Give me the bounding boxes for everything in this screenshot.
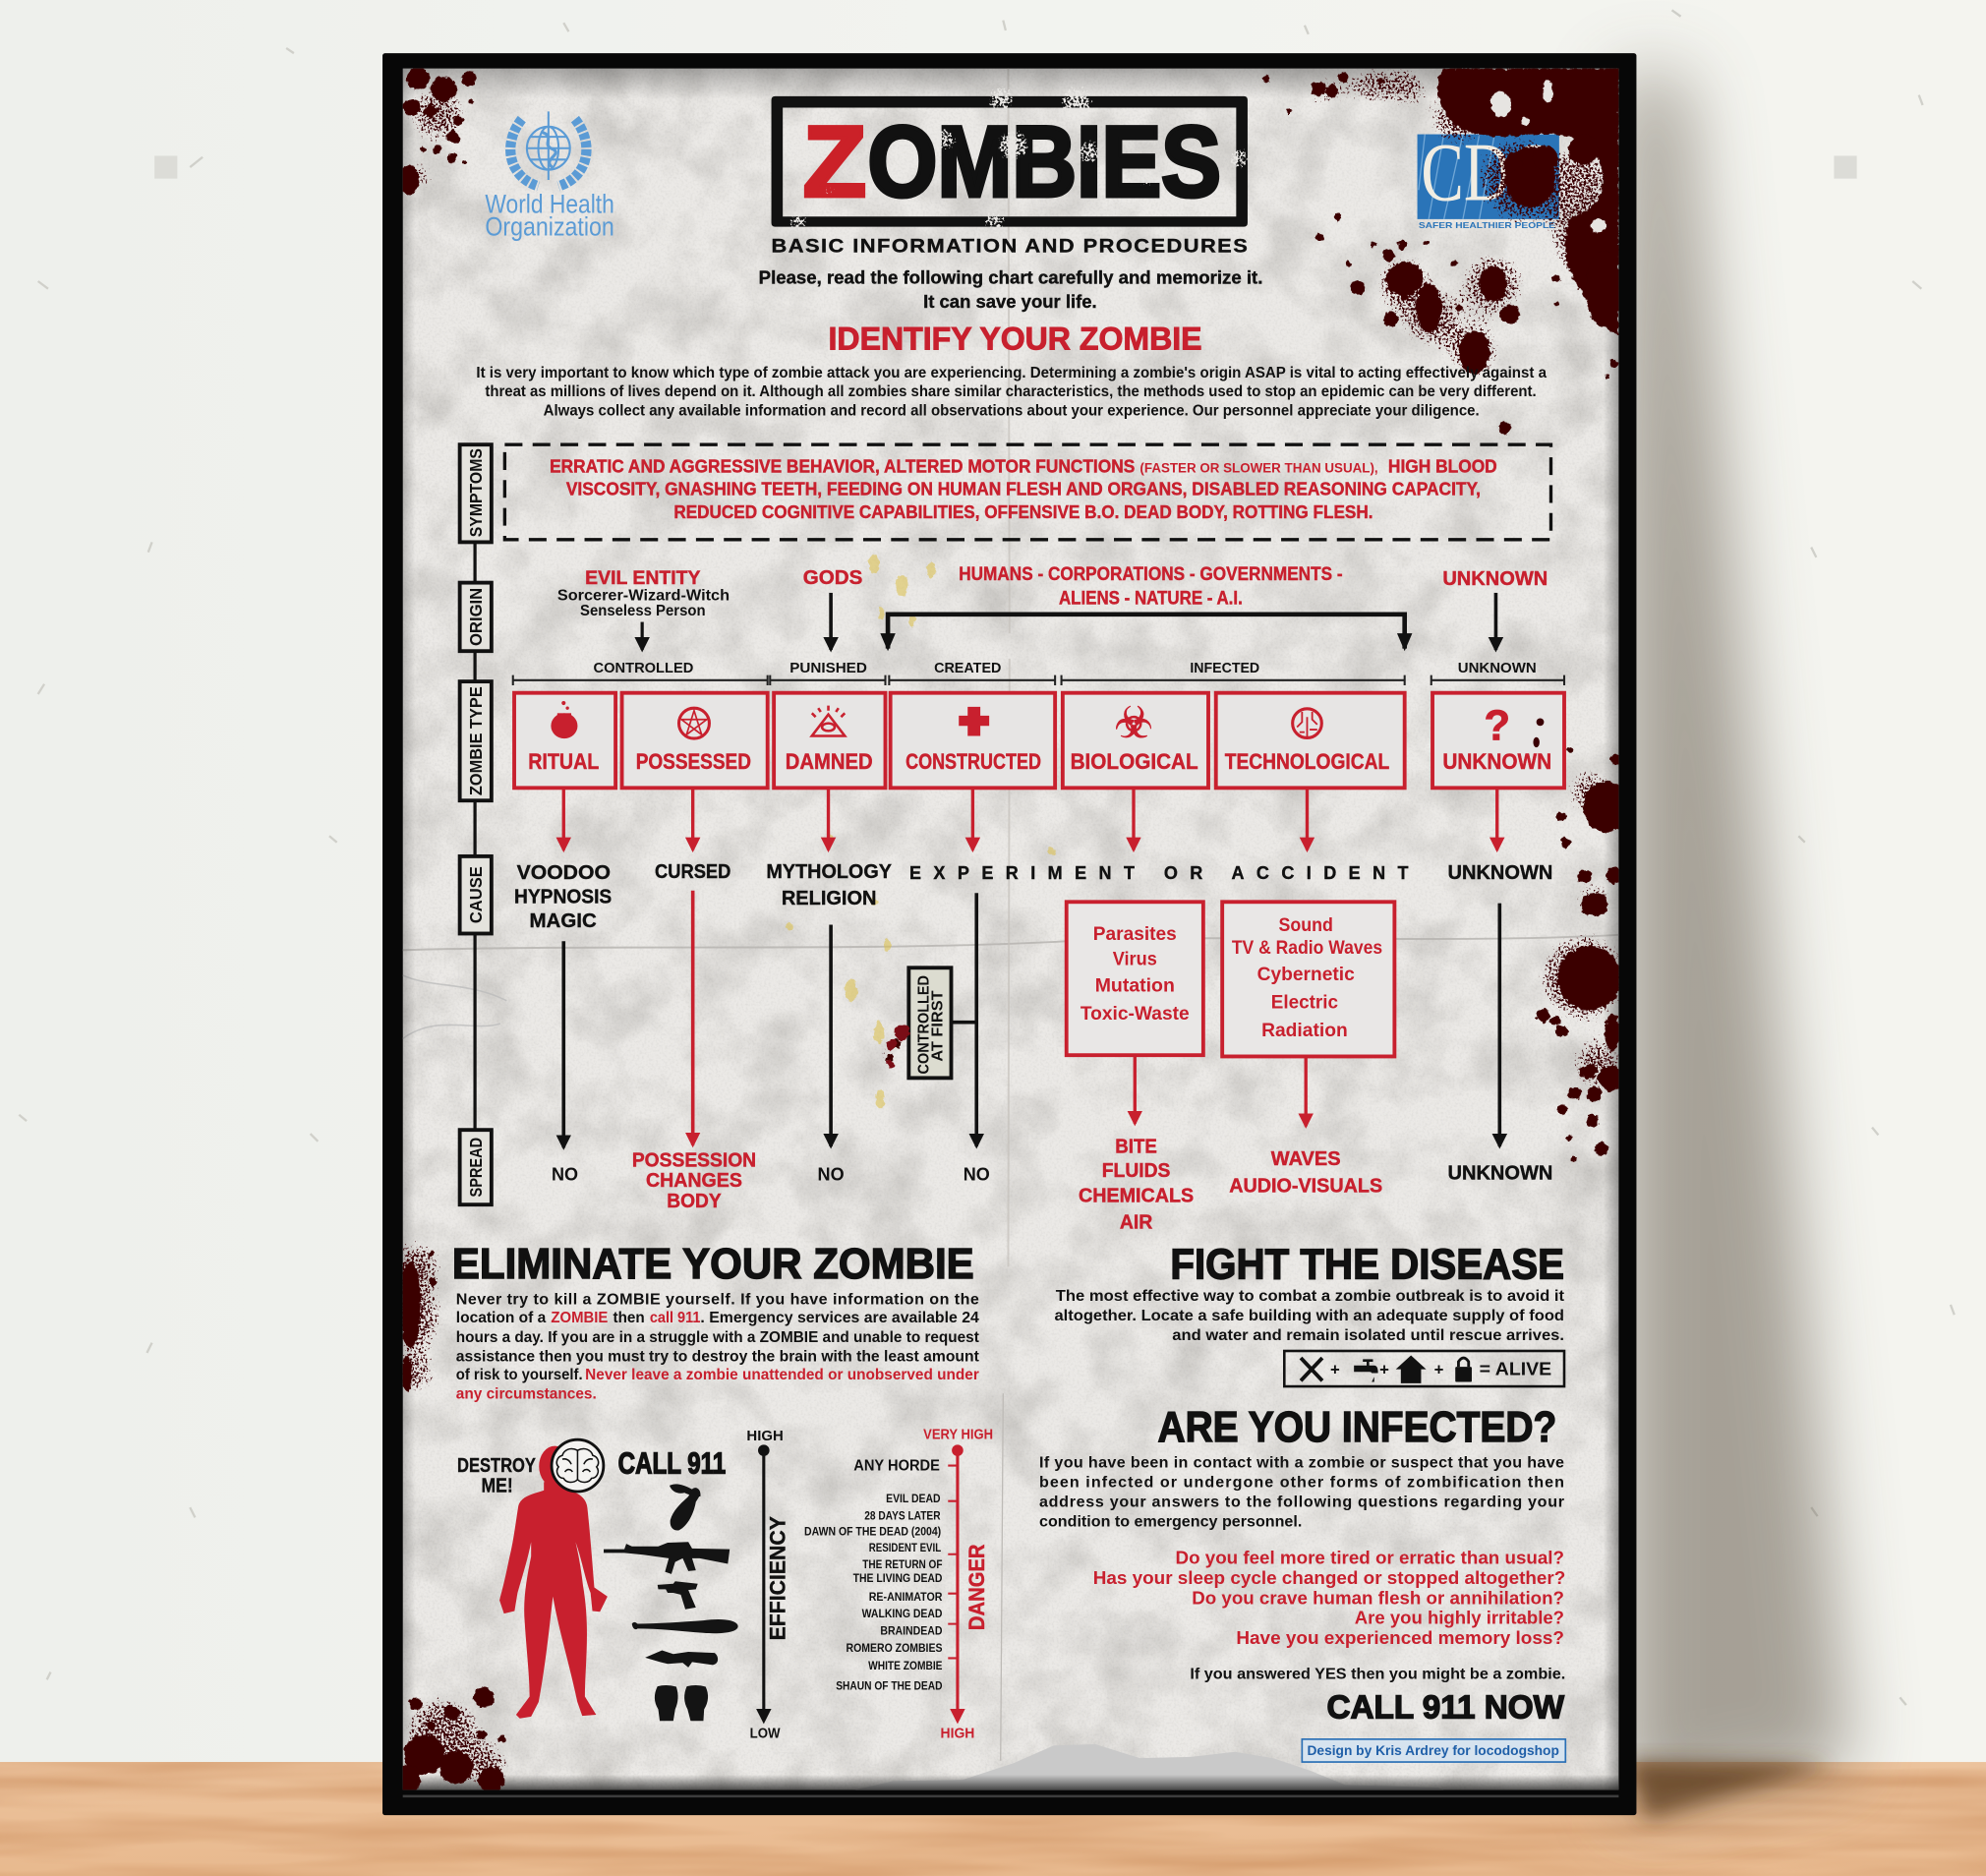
spread labels: NO — [552, 1164, 578, 1185]
type: biological — [1063, 693, 1208, 788]
type: damned: DAMNED — [786, 749, 873, 774]
icon: biohazard: ☣ — [1114, 698, 1153, 748]
icon: pentagram — [679, 708, 709, 738]
icon: question mark: ? — [1484, 701, 1510, 749]
biological causes panel: Parasites — [1093, 924, 1177, 945]
efficiency scale: LOW — [750, 1727, 781, 1742]
spread labels — [552, 1136, 1552, 1234]
title distress — [787, 84, 1252, 234]
formula box: food water shelter safety equals alive — [1284, 1351, 1564, 1386]
logo: CDC: SAFER HEALTHIER PEOPLE — [1419, 220, 1555, 230]
formula box: food water shelter safety equals alive: + — [1330, 1360, 1340, 1378]
type: ritual: RITUAL — [528, 749, 599, 774]
technological causes panel: Cybernetic — [1257, 965, 1355, 985]
group brackets: CREATED — [934, 661, 1002, 676]
infected questions: Do you feel more tired or erratic than usual? — [1176, 1548, 1564, 1567]
title frame — [772, 96, 1248, 227]
spread labels: AIR — [1120, 1212, 1152, 1234]
vertical category axis — [474, 443, 476, 1203]
intro text: It can save your life. — [923, 291, 1097, 312]
cause labels: CURSED — [655, 860, 730, 883]
call 911 weapons list — [604, 1445, 738, 1721]
formula box: food water shelter safety equals alive: = ALIVE — [1480, 1359, 1551, 1378]
eliminate paragraph: of risk to yourself. — [456, 1366, 583, 1383]
eliminate paragraph: ZOMBIE — [551, 1309, 609, 1326]
axis label: origin — [460, 583, 492, 651]
infected paragraph — [1039, 1454, 1565, 1530]
technological causes panel: Radiation — [1261, 1021, 1348, 1041]
logo: World Health Organization: Organization — [485, 212, 614, 242]
icon: circuit brain — [1293, 709, 1321, 737]
origin: evil entity: EVIL ENTITY — [585, 568, 701, 589]
wood floor — [0, 1762, 1986, 1876]
danger ranking labels: SHAUN OF THE DEAD — [836, 1679, 943, 1693]
icon: brain in circle — [552, 1439, 604, 1492]
cause labels: HYPNOSIS — [514, 886, 612, 909]
danger ranking labels: ROMERO ZOMBIES — [847, 1641, 942, 1655]
spread labels: BODY — [667, 1191, 722, 1212]
cause to spread arrows — [563, 891, 1499, 1147]
technological causes panel: Sound — [1279, 915, 1333, 936]
group brackets: PUNISHED — [789, 661, 867, 676]
icon: house — [1396, 1356, 1427, 1383]
icon: rifle — [604, 1542, 730, 1574]
type: unknown — [1432, 693, 1564, 788]
cause labels: MAGIC — [529, 909, 597, 932]
eliminate paragraph: then — [613, 1309, 645, 1326]
biological causes panel: Toxic-Waste — [1081, 1004, 1190, 1025]
paper showing through blood — [1490, 80, 1606, 232]
spread labels: NO — [818, 1164, 845, 1185]
icon: cauldron — [551, 701, 577, 738]
efficiency scale: EFFICIENCY — [766, 1516, 790, 1640]
origin: evil entity: Sorcerer-Wizard-Witch — [557, 587, 730, 605]
icon: human body — [499, 1446, 608, 1719]
type: biological: BIOLOGICAL — [1071, 749, 1198, 774]
symptoms dashed panel: HIGH BLOOD — [1388, 457, 1497, 477]
identify paragraph: Always collect any available information and record all observations about your experience. Our personnel appreciate your diligence. — [544, 403, 1480, 420]
danger ranking labels: THE LIVING DEAD — [853, 1571, 943, 1585]
danger ranking labels: 28 DAYS LATER — [864, 1508, 941, 1522]
symptoms dashed panel — [504, 444, 1550, 540]
infected paragraph: If you have been in contact with a zombie or suspect that you have — [1039, 1454, 1564, 1472]
origin: gods: GODS — [803, 567, 862, 589]
technological causes panel — [1222, 902, 1394, 1056]
eliminate paragraph: any circumstances. — [456, 1384, 597, 1402]
spread labels: NO — [964, 1164, 990, 1185]
infected paragraph: address your answers to the following questions regarding your — [1039, 1493, 1565, 1510]
infected questions: Has your sleep cycle changed or stopped altogether? — [1093, 1568, 1565, 1588]
black poster frame — [382, 53, 1636, 1815]
axis label: cause — [460, 856, 492, 933]
eliminate paragraph: location of a — [456, 1309, 547, 1326]
symptoms dashed panel: VISCOSITY, GNASHING TEETH, FEEDING ON HUMAN FLESH AND ORGANS, DISABLED REASONING CAPACITY, — [566, 480, 1481, 499]
infected questions: Are you highly irritable? — [1355, 1609, 1564, 1628]
origin: gods — [803, 567, 862, 650]
subtitle: BASIC INFORMATION AND PROCEDURES — [772, 236, 1249, 257]
formula box: food water shelter safety equals alive: + — [1434, 1360, 1444, 1378]
danger ranking labels: EVIL DEAD — [886, 1492, 941, 1505]
origin: humans and others with bracket: ALIENS - NATURE - A.I. — [1059, 589, 1243, 610]
axis label: symptoms — [460, 444, 492, 542]
danger ranking labels: RE-ANIMATOR — [869, 1590, 943, 1604]
type: constructed — [891, 693, 1055, 788]
efficiency scale — [746, 1429, 790, 1742]
spread labels: WAVES — [1271, 1148, 1341, 1170]
technological causes panel: Electric — [1271, 993, 1338, 1014]
formula box: food water shelter safety equals alive: + — [1379, 1360, 1389, 1378]
red arrows from types to causes — [563, 788, 1497, 850]
eliminate paragraph: Never try to kill a ZOMBIE yourself. If you have information on the — [456, 1290, 979, 1308]
eliminate paragraph: call 911 — [650, 1309, 700, 1326]
type: technological — [1216, 693, 1405, 788]
red arrows from panels to spread — [1135, 1056, 1306, 1126]
symptoms dashed panel: ERRATIC AND AGGRESSIVE BEHAVIOR, ALTERED MOTOR FUNCTIONS — [550, 457, 1135, 477]
axis label: origin: ORIGIN — [466, 588, 486, 646]
fight paragraph — [1054, 1287, 1565, 1344]
group brackets: CONTROLLED — [594, 661, 694, 676]
icon: eye in triangle — [812, 706, 845, 736]
spread labels: CHEMICALS — [1079, 1186, 1194, 1207]
destroy me figure: DESTROY — [457, 1454, 536, 1477]
icon: medical cross — [959, 707, 989, 736]
designer credit — [1302, 1739, 1565, 1762]
infected questions: Do you crave human flesh or annihilation? — [1192, 1589, 1564, 1609]
logo: World Health Organization: World Health — [485, 189, 614, 218]
infected paragraph: been infected or undergone other forms of zombification then — [1039, 1473, 1564, 1491]
spread labels: FLUIDS — [1102, 1160, 1170, 1182]
biological causes panel: Mutation — [1095, 976, 1175, 997]
danger ranking labels: ANY HORDE — [853, 1458, 940, 1475]
heading: are you infected: ARE YOU INFECTED? — [1157, 1403, 1556, 1451]
halo speckle — [382, 61, 1633, 1795]
efficiency scale: HIGH — [746, 1429, 784, 1444]
spread labels: CHANGES — [646, 1170, 742, 1192]
origin: evil entity: Senseless Person — [580, 602, 706, 619]
eliminate paragraph: . Emergency services are available 24 — [700, 1309, 979, 1326]
danger ranking labels: THE RETURN OF — [862, 1557, 943, 1571]
type: possessed: POSSESSED — [636, 749, 751, 774]
heading: identify your zombie: IDENTIFY YOUR ZOMBIE — [829, 322, 1202, 357]
eliminate paragraph: assistance then you must try to destroy the brain with the least amount — [456, 1347, 979, 1365]
symptoms dashed panel: (FASTER OR SLOWER THAN USUAL), — [1139, 461, 1378, 476]
callout: controlled at first: CONTROLLED — [914, 975, 932, 1074]
icon: pistol — [658, 1581, 698, 1610]
danger ranking labels: BRAINDEAD — [880, 1624, 943, 1638]
icon: WHO emblem — [510, 111, 586, 186]
biological causes panel — [1067, 902, 1203, 1055]
type: possessed — [622, 693, 768, 788]
type: ritual — [514, 693, 615, 788]
danger ranking labels: WHITE ZOMBIE — [868, 1659, 942, 1672]
axis label: cause: CAUSE — [466, 866, 486, 923]
eliminate paragraph: hours a day. If you are in a struggle with a ZOMBIE and unable to request — [456, 1328, 979, 1346]
fight paragraph: and water and remain isolated until rescue arrives. — [1172, 1326, 1564, 1344]
group brackets: INFECTED — [1190, 661, 1259, 676]
infected paragraph: condition to emergency personnel. — [1039, 1512, 1302, 1530]
axis label: spread — [460, 1130, 492, 1204]
group brackets: UNKNOWN — [1458, 661, 1537, 676]
title block: ZOMBIES: OMBIES — [867, 106, 1221, 218]
symptoms dashed panel: REDUCED COGNITIVE CAPABILITIES, OFFENSIVE B.O. DEAD BODY, ROTTING FLESH. — [673, 502, 1373, 522]
eliminate paragraph: Never leave a zombie unattended or unobserved under — [585, 1366, 980, 1383]
blood splatter — [382, 61, 1633, 1795]
call 911 now: CALL 911 NOW — [1326, 1690, 1564, 1727]
axis label: symptoms: SYMPTOMS — [466, 448, 486, 537]
cause labels: RELIGION — [782, 887, 876, 909]
axis label: zombie type — [460, 681, 492, 800]
spread labels: POSSESSION — [632, 1150, 756, 1172]
origin: humans and others with bracket — [880, 564, 1412, 651]
technological causes panel: TV & Radio Waves — [1232, 938, 1382, 959]
identify paragraph: threat as millions of lives depend on it. Although all zombies share similar characteristics, the methods used to stop an epidemic can be very different. — [485, 383, 1537, 400]
callout: controlled at first: AT FIRST — [928, 990, 946, 1062]
danger scale — [923, 1428, 993, 1742]
spread labels: BITE — [1115, 1136, 1157, 1157]
fight paragraph: altogether. Locate a safe building with an adequate supply of food — [1054, 1307, 1564, 1324]
axis label: spread: SPREAD — [466, 1138, 486, 1197]
danger ranking labels: DAWN OF THE DEAD (2004) — [804, 1524, 941, 1538]
cause labels: EXPERIMENT OR ACCIDENT — [909, 863, 1409, 883]
solid blobs — [395, 67, 1629, 1795]
danger ranking labels: RESIDENT EVIL — [869, 1541, 942, 1554]
cause labels: UNKNOWN — [1447, 861, 1552, 884]
icon: baseball bat — [632, 1619, 738, 1633]
type: damned — [774, 693, 885, 788]
cause labels — [514, 860, 1552, 932]
type: constructed: CONSTRUCTED — [905, 749, 1041, 774]
identify paragraph — [476, 365, 1547, 420]
call 911 weapons list: CALL 911 — [618, 1445, 726, 1480]
danger scale: DANGER — [964, 1544, 989, 1630]
icon: fork and knife — [1301, 1358, 1322, 1380]
intro text: Please, read the following chart carefully and memorize it. — [759, 267, 1262, 288]
cause labels: VOODOO — [517, 861, 611, 884]
danger ranking labels: WALKING DEAD — [862, 1607, 943, 1620]
axis label: zombie type: ZOMBIE TYPE — [466, 686, 486, 795]
type: unknown: UNKNOWN — [1442, 749, 1551, 774]
infected questions: Have you experienced memory loss? — [1236, 1628, 1564, 1648]
origin: unknown — [1442, 568, 1548, 650]
icon: padlock — [1455, 1358, 1472, 1382]
icon: molotov — [670, 1484, 701, 1531]
frame shadow — [1621, 76, 1849, 1819]
origin: evil entity — [557, 568, 730, 650]
icon: knife — [645, 1651, 718, 1668]
type: technological: TECHNOLOGICAL — [1225, 749, 1389, 774]
title block: ZOMBIES — [772, 96, 1248, 227]
group brackets — [513, 661, 1564, 685]
danger scale: HIGH — [941, 1727, 974, 1742]
title block: ZOMBIES: Z — [803, 106, 866, 218]
cause labels: MYTHOLOGY — [766, 860, 892, 883]
danger scale: VERY HIGH — [923, 1428, 993, 1443]
destroy me figure: ME! — [482, 1475, 513, 1497]
logo: World Health Organization — [485, 111, 614, 242]
danger ranking labels — [804, 1458, 943, 1693]
designer credit: Design by Kris Ardrey for locodogshop — [1307, 1743, 1559, 1759]
intro text — [759, 267, 1262, 312]
biological causes panel: Virus — [1113, 950, 1157, 970]
heading: eliminate your zombie: ELIMINATE YOUR ZOMBIE — [452, 1240, 974, 1288]
aged paper — [403, 69, 1618, 1789]
destroy me figure — [457, 1439, 608, 1719]
origin: unknown: UNKNOWN — [1442, 568, 1548, 590]
eliminate paragraph — [456, 1290, 980, 1402]
infected questions — [1093, 1548, 1565, 1648]
icon: fists — [655, 1685, 708, 1721]
callout: controlled at first — [887, 967, 951, 1078]
logo: CDC: CDC — [1421, 127, 1552, 219]
icon: water tap — [1350, 1359, 1378, 1382]
closing statement: If you answered YES then you might be a zombie. — [1190, 1666, 1565, 1683]
heading: fight the disease: FIGHT THE DISEASE — [1170, 1241, 1564, 1289]
spread labels: AUDIO-VISUALS — [1229, 1175, 1382, 1197]
origin: humans and others with bracket: HUMANS - CORPORATIONS - GOVERNMENTS - — [959, 564, 1343, 585]
spread labels: UNKNOWN — [1447, 1162, 1552, 1184]
identify paragraph: It is very important to know which type of zombie attack you are experiencing. Determining a zombie's origin ASAP is vital to acting effectively against a — [476, 365, 1547, 381]
fight paragraph: The most effective way to combat a zombie outbreak is to avoid it — [1056, 1287, 1565, 1305]
